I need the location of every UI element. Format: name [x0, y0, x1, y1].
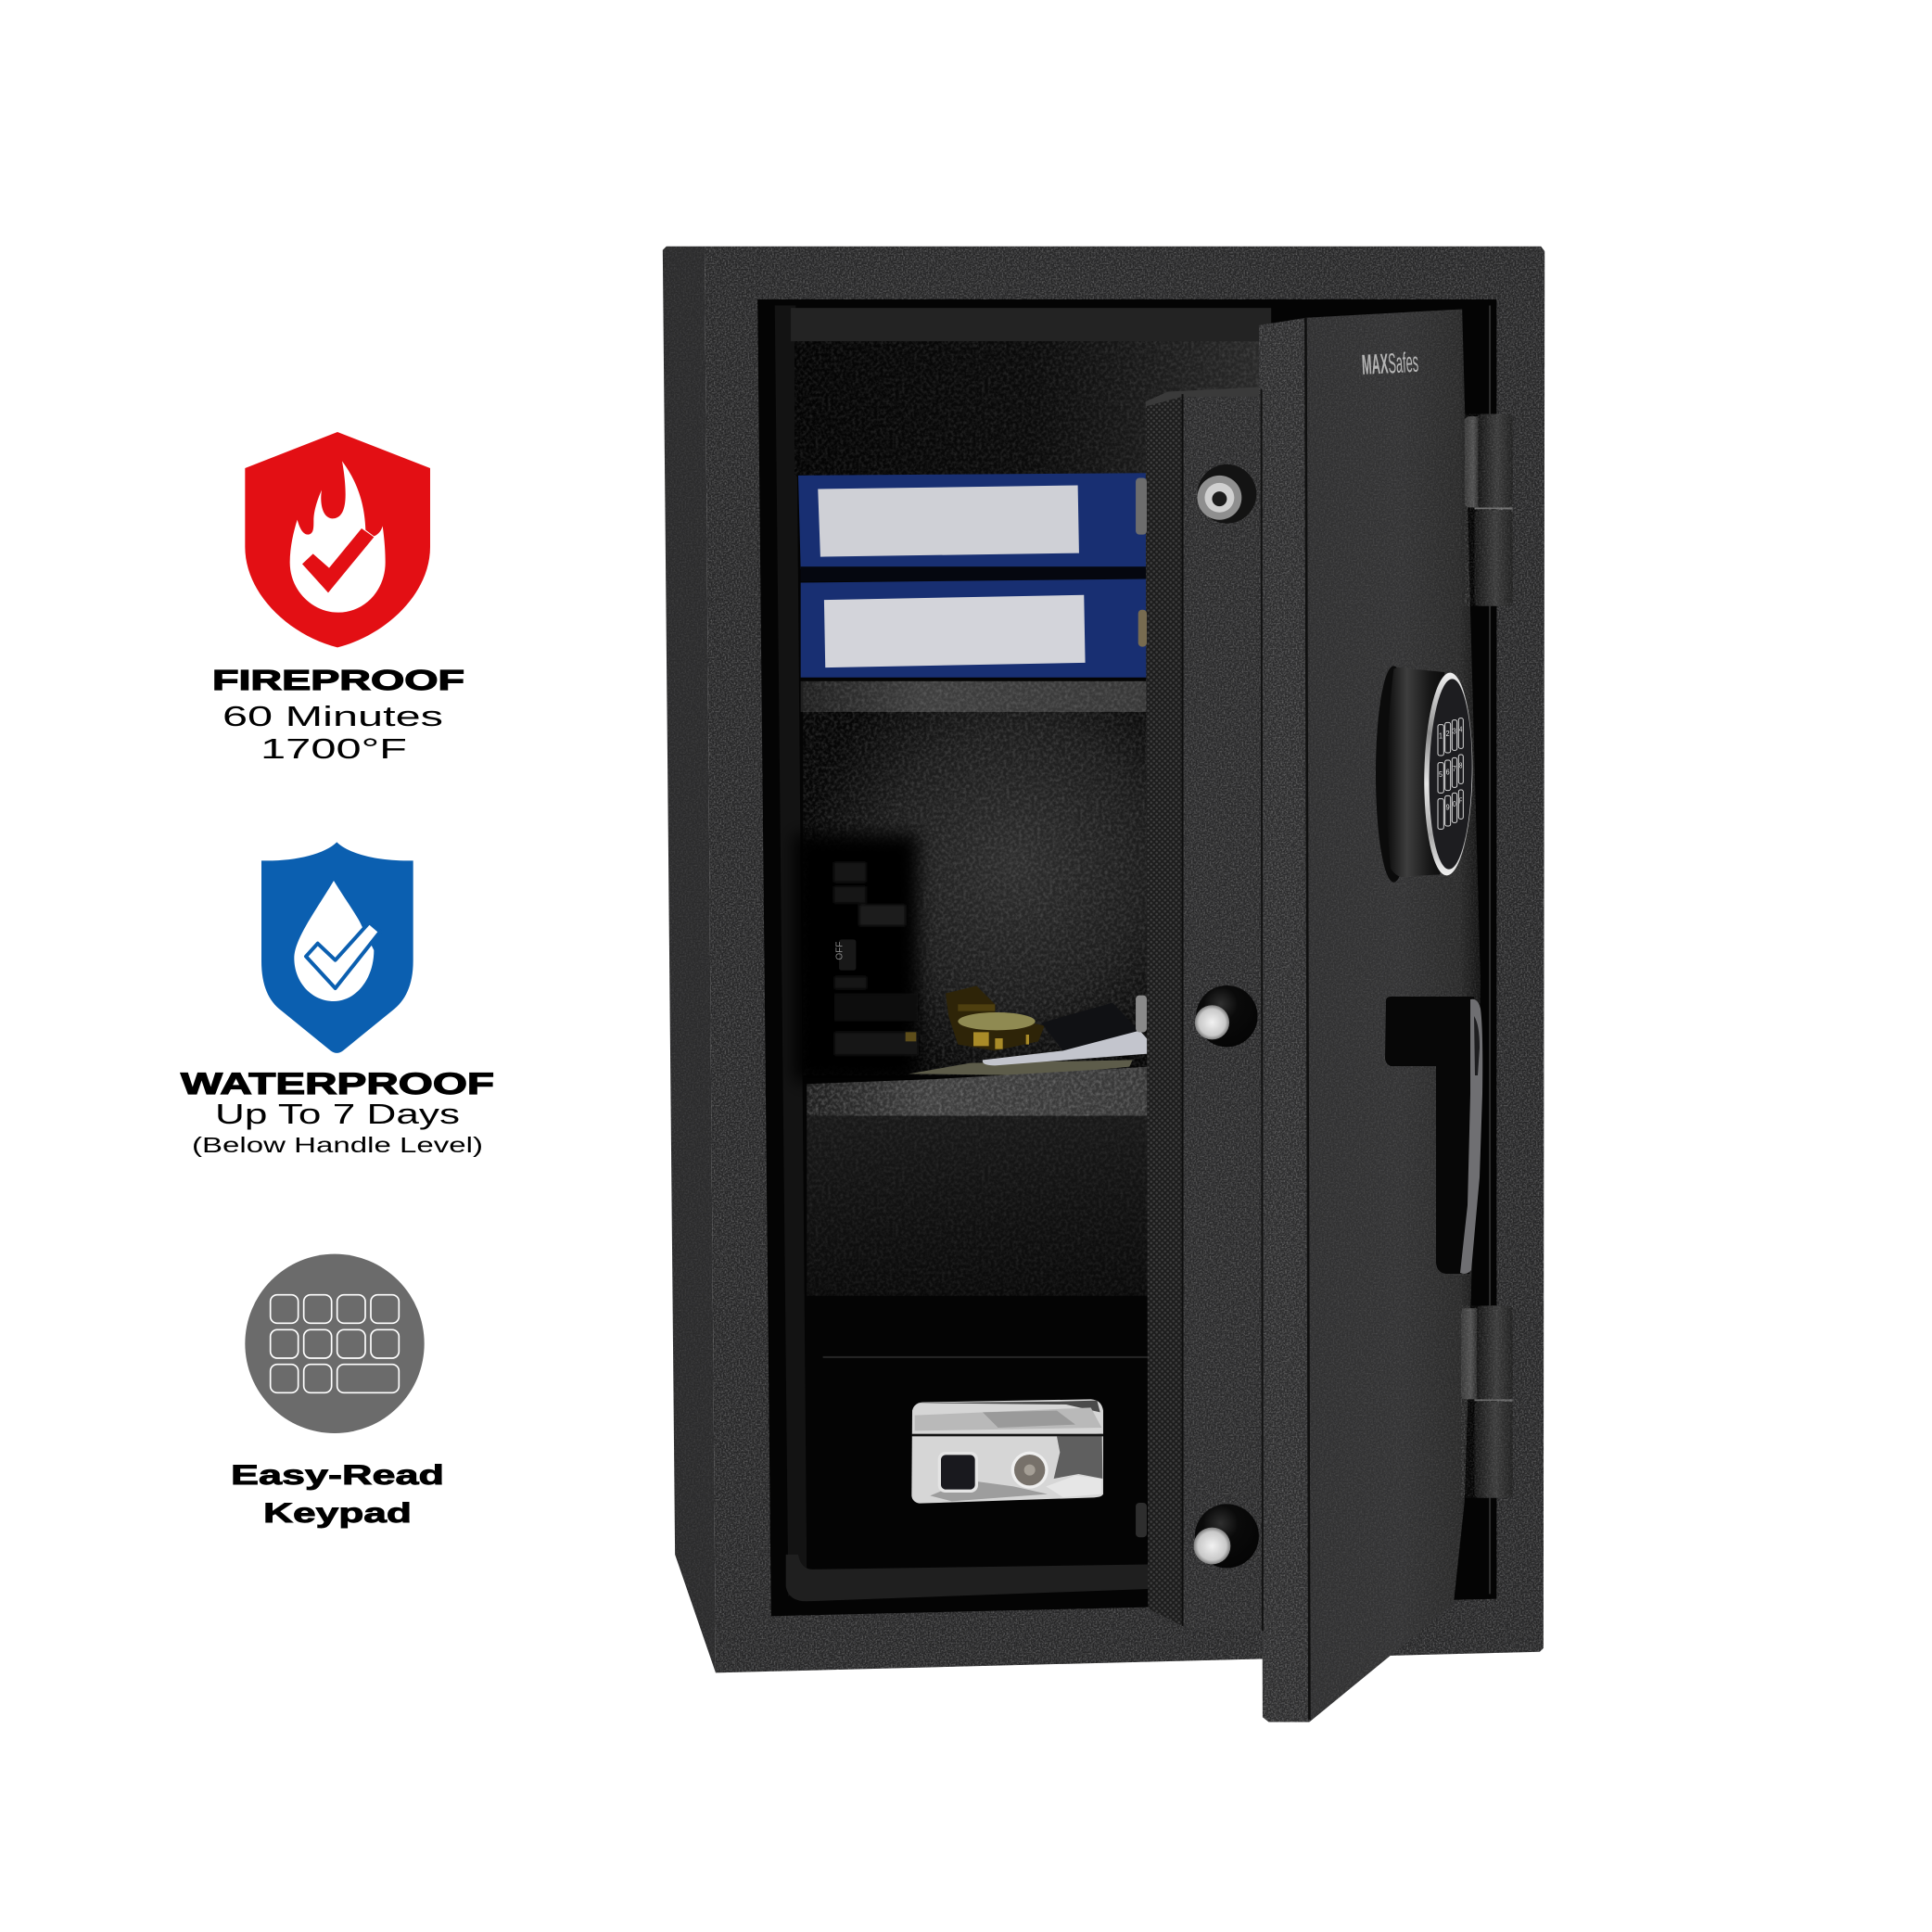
electronic keypad dial	[1376, 666, 1474, 883]
heading: waterproof: WATERPROOF	[181, 1067, 494, 1100]
keypad digits: 3	[1453, 727, 1456, 735]
bottom folder label	[824, 595, 1086, 667]
door inner panel grain	[1183, 388, 1263, 1631]
keypad digits: 7	[1453, 765, 1456, 773]
keypad digits: 1	[1439, 732, 1443, 741]
door handle	[1385, 997, 1482, 1274]
lower shelf	[807, 1067, 1148, 1116]
keypad digits: 9	[1446, 803, 1450, 811]
safe left side wall	[663, 247, 716, 1672]
text: 1700 F: 1700°F	[261, 732, 407, 765]
bottom hinge	[1461, 1305, 1513, 1498]
gap between folders	[801, 566, 1148, 581]
door edge seam	[1262, 389, 1263, 1631]
left wall grain	[663, 247, 716, 1672]
keypad digits: 4	[1459, 725, 1463, 733]
bolt top	[1197, 464, 1256, 524]
cash box	[911, 1399, 1103, 1504]
door inner mesh edge	[1146, 394, 1183, 1626]
text: up to 7 days: Up To 7 Days	[215, 1098, 460, 1130]
icon: grey circle with keypad	[245, 1254, 425, 1433]
middle back carpet	[803, 712, 1148, 1075]
mesh panel seam	[1182, 394, 1184, 1626]
dial shadow	[1376, 666, 1412, 883]
frame grain	[705, 247, 1544, 1672]
felt grain lower shelf	[807, 1067, 1148, 1116]
panel: keypad feature	[231, 1254, 444, 1529]
top rail	[791, 308, 1271, 341]
felt grain upper	[794, 341, 1269, 477]
keypad keys	[1438, 718, 1463, 829]
icon: red shield with flame and check	[245, 432, 430, 647]
heading: fireproof: FIREPROOF	[212, 664, 464, 696]
upper shelf	[801, 681, 1148, 712]
door front grain	[1305, 310, 1481, 1722]
slot vertical line	[1489, 306, 1491, 1594]
left inner rail	[775, 306, 807, 1596]
wallet and papers	[909, 1003, 1148, 1075]
bottom folder	[801, 578, 1148, 678]
camera lens: OFF	[834, 942, 845, 960]
door front	[1305, 310, 1481, 1722]
felt grain lower back	[807, 1116, 1148, 1298]
heading: keypad: Keypad	[263, 1498, 412, 1529]
brand logo: MAXSafes	[1361, 347, 1419, 381]
lower back carpet	[807, 1116, 1148, 1298]
keypad digits	[1439, 725, 1463, 811]
keypad digits: 6	[1446, 768, 1450, 776]
text: 60 minutes: 60 Minutes	[222, 700, 443, 732]
upper back carpet	[794, 341, 1269, 477]
door seam	[1305, 318, 1309, 1720]
top folder	[798, 473, 1148, 569]
dial chrome rim	[1422, 672, 1474, 876]
bolt middle	[1195, 985, 1258, 1047]
panel: fireproof feature	[212, 432, 464, 765]
keypad digits: 5	[1439, 770, 1443, 779]
door edge	[1259, 318, 1309, 1722]
camera lens	[794, 834, 918, 1082]
inner bottom rail	[786, 1555, 1148, 1601]
latch pins	[1136, 478, 1147, 1537]
keypad digits: F	[1459, 797, 1462, 806]
drawer compartment	[807, 1296, 1148, 1570]
drawer line	[823, 1356, 1148, 1358]
door inner panel	[1183, 388, 1263, 1631]
keypad digits: 0	[1453, 800, 1456, 808]
bolt bottom	[1194, 1504, 1259, 1568]
heading: easy-read: Easy-Read	[231, 1460, 444, 1491]
dial face	[1428, 679, 1473, 870]
door edge grain	[1259, 318, 1309, 1722]
text: below handle level: (Below Handle Level)	[192, 1133, 483, 1157]
panel: waterproof feature	[181, 842, 494, 1157]
top hinge	[1465, 413, 1513, 606]
icon: blue shield with water drop and check	[261, 842, 413, 1053]
felt grain middle	[803, 681, 1148, 1075]
keypad digits: 8	[1459, 762, 1463, 770]
folders	[798, 473, 1148, 678]
safe front frame	[705, 247, 1544, 1672]
dial body	[1387, 667, 1444, 877]
top folder label	[818, 486, 1079, 557]
gold watch	[946, 985, 1045, 1050]
door inner top pad	[1146, 387, 1263, 406]
safe illustration	[663, 247, 1544, 1672]
keypad digits: 2	[1446, 730, 1450, 738]
opening	[757, 299, 1496, 1616]
